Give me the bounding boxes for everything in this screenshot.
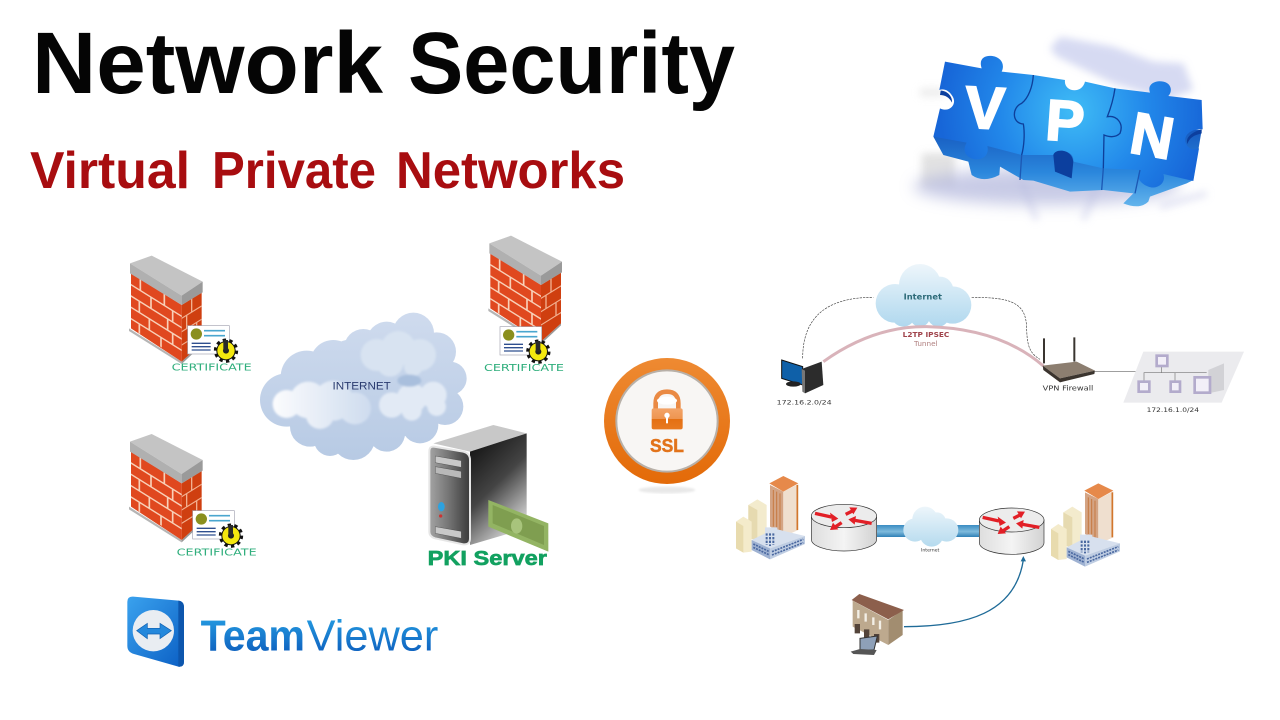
icon: VPN puzzle: P xyxy=(1044,88,1086,155)
puzzle sides xyxy=(933,120,1202,206)
subtitle: Networks xyxy=(396,142,625,200)
PKI server xyxy=(428,425,548,570)
puzzle seams xyxy=(1014,75,1121,168)
internet cloud xyxy=(903,507,958,554)
firewall 1 xyxy=(129,256,252,373)
icon: VPN firewall router: VPN Firewall xyxy=(1043,385,1093,393)
panel: site-to-site diagram xyxy=(736,476,1120,655)
logo icon xyxy=(127,597,184,667)
LAN panel xyxy=(1123,352,1244,414)
connection lines xyxy=(803,297,1040,359)
PKI server: PKI Server xyxy=(428,547,547,570)
icon: computer: 172.16.2.0/24 xyxy=(777,400,832,407)
panel: L2TP IPSEC tunnel diagram xyxy=(777,264,1244,414)
icon: SSL badge: SSL xyxy=(650,435,684,456)
subtitle: Virtual xyxy=(30,142,190,200)
building left xyxy=(736,476,805,559)
puzzle top xyxy=(933,56,1203,188)
firewall 2: CERTIFICATE xyxy=(484,363,564,374)
puzzle letters: V xyxy=(964,73,1007,142)
panel: PKI network xyxy=(129,236,564,570)
router right xyxy=(979,508,1044,554)
logo: TeamViewer xyxy=(127,597,438,667)
tunnel label: L2TP IPSEC xyxy=(903,331,949,339)
title xyxy=(32,15,735,112)
internet cloud xyxy=(876,264,971,327)
internet cloud xyxy=(260,313,467,460)
arrow: remote access xyxy=(904,556,1026,627)
firewall 1: CERTIFICATE xyxy=(172,362,252,373)
tunnel arc xyxy=(823,327,1043,366)
building right xyxy=(1051,483,1120,567)
subtitle xyxy=(30,142,625,200)
title: Security xyxy=(408,15,735,112)
internet cloud: Internet xyxy=(904,293,942,302)
LAN panel: 172.16.1.0/24 xyxy=(1147,407,1199,414)
firewall 2 xyxy=(484,236,564,374)
icon: VPN firewall router xyxy=(1043,337,1095,393)
subtitle: Private xyxy=(212,142,376,200)
puzzle notches xyxy=(940,91,1202,178)
router left xyxy=(811,504,877,551)
logo: TeamViewer: Viewer xyxy=(307,612,438,661)
pipe xyxy=(875,525,982,537)
title: Network xyxy=(32,15,384,112)
internet cloud: Internet xyxy=(921,548,939,554)
icon: VPN puzzle: N xyxy=(1126,101,1179,172)
logo: TeamViewer: Team xyxy=(201,612,305,661)
firewall 3: CERTIFICATE xyxy=(177,547,257,558)
internet cloud: INTERNET xyxy=(332,380,391,392)
icon: laptop xyxy=(851,636,877,655)
icon: computer xyxy=(777,360,832,407)
icon: branch office xyxy=(852,594,904,645)
icon: SSL badge xyxy=(604,358,730,493)
panel: L2TP IPSEC tunnel diagram: Tunnel xyxy=(913,340,938,348)
firewall 3 xyxy=(129,434,257,558)
icon: VPN puzzle xyxy=(913,37,1207,220)
